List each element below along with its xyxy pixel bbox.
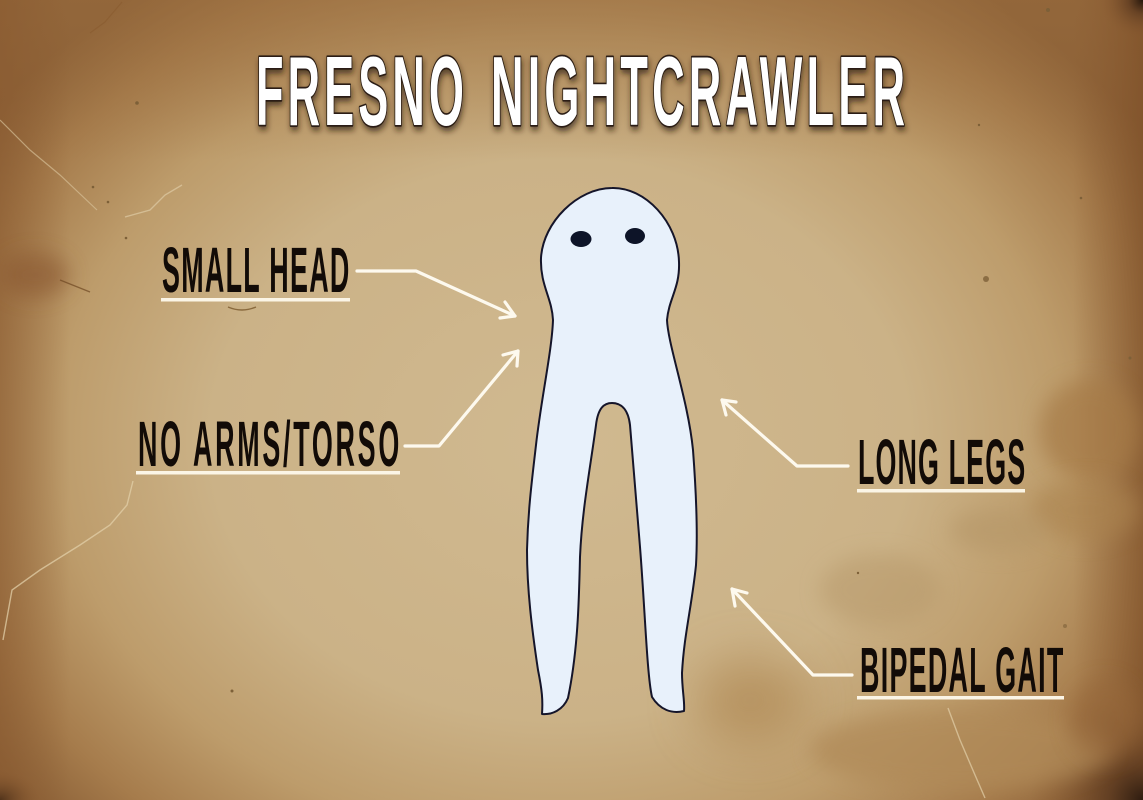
label: no arms/torso: NO ARMS/TORSO [138, 410, 399, 480]
creature body [527, 188, 697, 714]
label: long legs: LONG LEGS [858, 428, 1025, 498]
arrow: long legs [722, 400, 848, 466]
label: small head: SMALL HEAD [162, 236, 349, 306]
left eye [570, 231, 592, 247]
paper specks [92, 8, 1132, 692]
title: NIGHTCRAWLER [491, 38, 905, 147]
paper cracks [0, 120, 97, 210]
right eye [625, 228, 645, 244]
arrow: small head [357, 271, 515, 318]
label: bipedal gait: BIPEDAL GAIT [860, 636, 1063, 706]
arrow: bipedal gait [732, 589, 852, 675]
arrow: no arms/torso [405, 351, 518, 446]
title: FRESNO [256, 38, 464, 147]
creature figure [527, 188, 697, 714]
title [256, 38, 905, 147]
